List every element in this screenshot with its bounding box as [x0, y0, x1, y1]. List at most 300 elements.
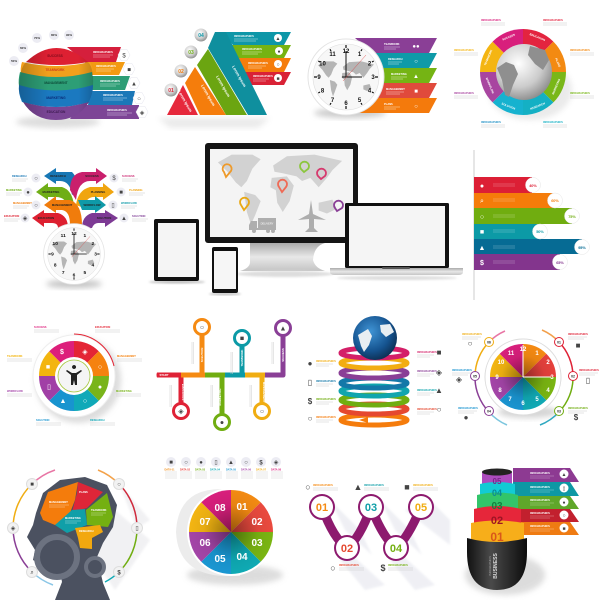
labels: INFOGRAPHICS — [417, 388, 437, 392]
clock: 9 — [51, 252, 54, 258]
node icons: ◈ — [178, 408, 184, 416]
panel: pie clock with numbered ring — [452, 330, 599, 425]
gears — [37, 537, 104, 577]
bar icons and text: ▲ — [479, 245, 485, 252]
outer progress arc — [74, 334, 114, 366]
labels: INFOGRAPHICS — [454, 91, 474, 95]
right ribbons: INFOGRAPHICS — [242, 47, 262, 51]
end circles — [526, 178, 590, 270]
top legend: ▲ — [228, 460, 234, 466]
icons — [118, 50, 148, 118]
end circles: 40% — [529, 184, 537, 188]
labels: EDUCATION — [95, 325, 110, 329]
ring arcs — [13, 470, 137, 585]
triangle strips: Lorem Ipsum — [215, 75, 231, 98]
percent bubbles — [9, 30, 74, 66]
triangle strips: Lorem Ipsum — [200, 84, 216, 107]
right ribbons: INFOGRAPHICS — [530, 524, 550, 528]
numbered balls: 03 — [188, 50, 194, 56]
pie — [187, 488, 275, 576]
clock: 1 — [358, 52, 362, 58]
rings — [341, 348, 407, 425]
side icons and labels — [4, 174, 148, 222]
clock pie: 6 — [521, 401, 525, 407]
icons: ■ — [404, 482, 410, 492]
clock: 10 — [53, 241, 58, 247]
bar icons and text: ⌕ — [480, 198, 484, 205]
ring segments: MARKETING — [551, 78, 561, 95]
ribbons: RESEARCH — [388, 57, 403, 61]
side icons and labels: EDUCATION — [4, 214, 19, 218]
brain regions — [40, 482, 113, 549]
numbered badges: 06 — [487, 340, 491, 344]
panel: person wheel — [7, 325, 142, 425]
labels: INFOGRAPHICS — [388, 563, 408, 567]
panel: clock with ribbons — [308, 38, 437, 118]
ribbons: ○ — [414, 59, 418, 65]
arrows: PLANNING — [91, 190, 105, 194]
branch labels: TEAMWORK — [240, 350, 244, 366]
icons — [308, 348, 443, 423]
ring icons — [8, 478, 142, 578]
pie: 05 — [214, 554, 226, 565]
ring icons: ○ — [117, 482, 121, 488]
icons: ▲ — [435, 386, 443, 395]
ribbons: INFOGRAPHICS — [93, 50, 113, 54]
circles: 04 — [390, 543, 403, 555]
clock: 5 — [358, 98, 362, 104]
delivery truck: DELIVERY — [261, 222, 274, 226]
clock: 11 — [61, 233, 66, 239]
connector — [322, 507, 421, 548]
icons: ○ — [437, 405, 442, 414]
labels: TEAMWORK — [7, 354, 23, 358]
clock: 9 — [317, 75, 321, 81]
labels: INFOGRAPHICS — [364, 483, 384, 487]
labels: INFOGRAPHICS — [568, 332, 588, 336]
right ribbons: INFOGRAPHICS — [530, 498, 550, 502]
brain regions: MANAGEMENT — [49, 500, 68, 504]
bars — [474, 177, 582, 270]
backing disc — [176, 489, 240, 576]
top legend: ▯ — [214, 460, 218, 466]
arcs — [475, 330, 573, 425]
branches — [181, 327, 283, 422]
icons — [305, 482, 410, 573]
horizontal line: START — [159, 373, 169, 377]
ring segments: TEAMWORK — [483, 49, 493, 66]
clock pie: 12 — [520, 347, 527, 353]
labels: INFOGRAPHICS — [458, 406, 478, 410]
right ribbons: INFOGRAPHICS — [530, 511, 550, 515]
branch labels — [170, 342, 285, 407]
top legend — [164, 457, 283, 478]
numbered badges: 03 — [557, 410, 561, 414]
icons — [456, 339, 590, 422]
right ribbons — [221, 32, 291, 85]
icons: ■ — [576, 341, 581, 350]
ring icons: ⌕ — [30, 570, 34, 576]
icons: $ — [122, 54, 126, 60]
clock: 5 — [83, 270, 86, 276]
right ribbons — [513, 468, 579, 535]
clock pie: 1 — [535, 351, 539, 357]
panel: globe ring — [454, 18, 594, 127]
side icons and labels: $ — [112, 176, 116, 182]
arrows: SOLUTION — [97, 216, 111, 220]
branch labels: MANAGEMENT — [262, 382, 266, 402]
pie: 01 — [236, 502, 248, 513]
clock pie: 10 — [498, 360, 505, 366]
clock: 1 — [83, 233, 86, 239]
top legend: $ — [259, 460, 263, 466]
ribbons — [355, 38, 437, 113]
icons: ● — [308, 359, 313, 368]
stacked layers: 04 — [492, 488, 502, 498]
arrows: WORKFLOW — [83, 203, 101, 207]
labels: INFOGRAPHICS — [316, 397, 336, 401]
clock pie: 4 — [546, 388, 550, 394]
labels: MANAGEMENT — [117, 354, 136, 358]
ribbons: MARKETING — [391, 72, 407, 76]
ribbons: ●● — [412, 44, 420, 50]
wheel segments — [39, 341, 109, 411]
right ribbons: ■ — [276, 76, 280, 82]
labels: INFOGRAPHICS — [570, 48, 590, 52]
side icons and labels: ■ — [119, 190, 123, 196]
numbered balls: 02 — [178, 69, 184, 75]
bar icons and text — [479, 183, 515, 267]
labels — [454, 18, 594, 127]
percent bubbles: 80% — [51, 33, 57, 37]
wheel segments: ■ — [46, 364, 50, 371]
labels: INFOGRAPHICS — [417, 407, 437, 411]
sphere bands: MANAGEMENT — [44, 81, 68, 85]
wheel segments: ▲ — [60, 398, 66, 405]
end circles: 75% — [568, 215, 576, 219]
icons: ▯ — [308, 378, 312, 387]
panel: stacked capsule — [465, 468, 579, 595]
branch labels: SUCCESS — [281, 348, 285, 362]
right ribbons: ○ — [562, 513, 566, 519]
brain regions: MARKETING — [65, 516, 81, 520]
ribbons: PLANS — [384, 102, 393, 106]
stacked layers — [471, 468, 524, 544]
icons: ○ — [468, 339, 473, 348]
end circles: 50% — [536, 230, 544, 234]
end circles: 60% — [551, 199, 559, 203]
ribbons: INFOGRAPHICS — [96, 64, 116, 68]
icons: ○ — [330, 563, 336, 573]
bar icons and text: ● — [480, 183, 484, 190]
labels: INFOGRAPHICS — [568, 406, 588, 410]
circles: 03 — [365, 502, 377, 514]
clock: 8 — [54, 262, 57, 268]
side icons and labels: ● — [26, 190, 30, 196]
clock pie: 5 — [535, 397, 539, 403]
clock: 12 — [343, 49, 350, 55]
top legend: DATA 07 — [256, 468, 267, 472]
right ribbons: INFOGRAPHICS — [234, 34, 254, 38]
wheel segments: ● — [98, 384, 102, 391]
clock: 3 — [371, 75, 375, 81]
panel: devices — [149, 143, 463, 295]
clock: 8 — [321, 88, 325, 94]
wheel segments: ◈ — [82, 349, 88, 356]
percent bubbles: 90% — [66, 33, 72, 37]
clock pie — [485, 339, 561, 415]
node icons — [178, 324, 286, 426]
arrows: MANAGEMENT — [52, 203, 72, 207]
icons: ○ — [308, 414, 313, 423]
brain regions: PLANS — [79, 490, 88, 494]
right ribbons: ■ — [562, 526, 566, 532]
right ribbons: ● — [277, 49, 281, 55]
ring segments: PLANS — [554, 57, 562, 68]
pie: 07 — [199, 517, 211, 528]
panel: numbered pie — [164, 457, 283, 585]
side icons and labels: MANAGEMENT — [13, 201, 32, 205]
numbered badges: 05 — [473, 374, 477, 378]
right ribbons: INFOGRAPHICS — [253, 74, 273, 78]
icons: ▲ — [354, 482, 362, 492]
panel: globe with spiral rings — [308, 316, 443, 425]
top legend: ◈ — [274, 460, 279, 466]
clock: 4 — [368, 88, 372, 94]
arrows: RESEARCH — [50, 174, 66, 178]
phone — [209, 247, 241, 295]
clock: 7 — [62, 270, 65, 276]
head silhouette — [27, 477, 117, 600]
labels: INFOGRAPHICS — [316, 379, 336, 383]
top legend: DATA 06 — [241, 468, 252, 472]
icons: $ — [380, 563, 386, 573]
pie: 08 — [214, 503, 226, 514]
labels: INFOGRAPHICS — [339, 563, 359, 567]
node icons: ▲ — [280, 326, 286, 332]
clock: 3 — [94, 252, 97, 258]
clock: 6 — [344, 101, 348, 107]
panel: timeline — [156, 320, 290, 430]
top legend: DATA 03 — [195, 468, 206, 472]
pie: 04 — [236, 552, 248, 563]
top legend: ○ — [184, 460, 188, 466]
labels: INFOGRAPHICS — [417, 350, 437, 354]
icons: ▲ — [131, 82, 137, 88]
ring segments: SUCCESS — [502, 33, 516, 41]
percent bubbles: 70% — [34, 36, 40, 40]
labels: INFOGRAPHICS — [452, 368, 472, 372]
sphere bands: MARKETING — [46, 96, 66, 100]
clock: 2 — [368, 62, 372, 68]
stacked layers: 03 — [491, 501, 503, 512]
numbered balls — [164, 28, 208, 96]
labels: RESEARCH — [90, 418, 105, 422]
ring icons: $ — [117, 570, 121, 576]
ring segments: SOLUTION — [501, 102, 516, 111]
arrows: SUCCESS — [85, 174, 99, 178]
ribbons: INFOGRAPHICS — [100, 79, 120, 83]
ring icons: ■ — [30, 482, 34, 488]
side icons and labels: PLANNING — [129, 188, 143, 192]
numbered badges — [470, 338, 578, 416]
clock: 12 — [71, 231, 77, 237]
ring segments: EDUCATION — [529, 32, 546, 42]
side icons and labels: ▯ — [111, 203, 115, 209]
ribbons: ▲ — [413, 74, 419, 80]
wheel segments: ○ — [83, 398, 87, 405]
percent bubbles: 60% — [20, 46, 26, 50]
ribbons: INFOGRAPHICS — [103, 93, 123, 97]
side icons and labels: ▲ — [121, 216, 127, 222]
pie: 02 — [251, 517, 263, 528]
clock: 10 — [319, 62, 326, 68]
numbered badges: 01 — [557, 340, 561, 344]
clock pie: 9 — [495, 375, 499, 381]
numbered balls: 01 — [168, 88, 174, 94]
map pins — [223, 162, 343, 211]
ribbons: ○ — [414, 104, 418, 110]
side icons and labels: WORKFLOW — [121, 201, 137, 205]
ring segments: WORKFLOW — [485, 77, 495, 95]
panel: triangle chart — [158, 28, 291, 128]
right ribbons: INFOGRAPHICS — [248, 61, 268, 65]
top legend: ○ — [244, 460, 248, 466]
globe — [496, 44, 552, 100]
sphere bands: EDUCATION — [47, 110, 66, 114]
labels: INFOGRAPHICS — [417, 369, 437, 373]
wheel segments: $ — [60, 349, 64, 356]
right ribbons: ▲ — [562, 472, 566, 478]
ribbons: INFOGRAPHICS — [107, 108, 127, 112]
node icons: ■ — [240, 336, 244, 342]
globe — [353, 316, 397, 360]
labels: INFOGRAPHICS — [481, 18, 501, 22]
labels: WORKFLOW — [7, 389, 23, 393]
clock pie: 8 — [498, 388, 502, 394]
numbered balls: 04 — [198, 33, 204, 39]
right ribbons: INFOGRAPHICS — [530, 485, 550, 489]
icons: ○ — [305, 482, 311, 492]
center person — [55, 357, 93, 395]
arrows: EDUCATION — [38, 216, 54, 220]
arrows — [32, 168, 118, 228]
icons: ◈ — [140, 110, 145, 116]
icons: ▯ — [586, 376, 590, 385]
clock — [308, 39, 384, 115]
circles — [309, 494, 434, 561]
branch labels: EDUCATION — [181, 384, 185, 400]
stacked layers: 05 — [493, 477, 502, 486]
end circles: 65% — [556, 261, 564, 265]
clock pie: 2 — [546, 360, 550, 366]
triangle strips: Lorem Ipsum — [177, 90, 193, 113]
black capsule: INFOGRAPHICS — [488, 556, 492, 576]
labels: INFOGRAPHICS — [454, 48, 474, 52]
stacked layers: 01 — [490, 530, 504, 544]
side icons and labels: MARKETING — [6, 188, 22, 192]
bar icons and text: $ — [480, 260, 484, 267]
clock: 2 — [91, 241, 94, 247]
clock: 11 — [329, 52, 336, 58]
clock: 4 — [91, 262, 94, 268]
wheel segments: ○ — [98, 364, 102, 371]
circles: 02 — [341, 543, 353, 555]
monitor — [205, 143, 358, 277]
pie: 06 — [199, 538, 211, 549]
percent bubbles: 50% — [11, 59, 17, 63]
icons: $ — [574, 413, 579, 422]
branch labels: MARKETING — [218, 389, 222, 405]
laptop — [330, 203, 463, 280]
bar icons and text: ○ — [480, 214, 484, 221]
sphere bands — [19, 48, 93, 120]
side icons and labels: RESEARCH — [12, 174, 27, 178]
black capsule: BUSINESS — [493, 553, 499, 579]
icons: ● — [464, 413, 469, 422]
top legend: ● — [199, 460, 203, 466]
pie: 03 — [251, 538, 263, 549]
top legend: DATA 02 — [180, 468, 191, 472]
stacked layers: 02 — [491, 515, 503, 527]
labels — [313, 483, 438, 570]
icons: ◈ — [436, 368, 443, 377]
labels: INFOGRAPHICS — [413, 483, 433, 487]
clock — [44, 224, 104, 284]
right ribbons: ● — [562, 500, 566, 506]
brain regions: RESEARCH — [79, 529, 94, 533]
clock pie: 3 — [550, 375, 554, 381]
labels — [316, 350, 437, 422]
triangle strips — [167, 32, 267, 115]
labels: SUCCESS — [34, 325, 47, 329]
black capsule — [467, 538, 527, 590]
right ribbons: ▯ — [563, 486, 566, 492]
side icons and labels: SUCCESS — [122, 174, 135, 178]
circles: 05 — [415, 502, 427, 514]
clock pie: 11 — [508, 351, 515, 357]
ribbons: ■ — [414, 89, 418, 95]
side icons and labels: ○ — [34, 203, 38, 209]
ribbons: TEAMWORK — [384, 42, 400, 46]
icons: ○ — [137, 96, 141, 102]
node icons: ○ — [260, 408, 264, 416]
labels: INFOGRAPHICS — [570, 91, 590, 95]
labels: MARKETING — [116, 389, 132, 393]
tablet — [149, 219, 205, 284]
ribbons — [67, 47, 139, 119]
ring segments: RESEARCH — [530, 101, 546, 111]
labels: INFOGRAPHICS — [579, 368, 599, 372]
top legend: DATA 01 — [164, 468, 175, 472]
right ribbons: INFOGRAPHICS — [530, 471, 550, 475]
numbered badges: 02 — [571, 374, 575, 378]
ring icons: ▯ — [135, 526, 139, 532]
end circles: 95% — [578, 246, 586, 250]
top legend: DATA 08 — [271, 468, 282, 472]
arrows: MARKETING — [43, 190, 59, 194]
side icons and labels: SOLUTION — [132, 214, 146, 218]
bar icons and text: ■ — [480, 229, 484, 236]
labels: INFOGRAPHICS — [543, 120, 563, 124]
labels: INFOGRAPHICS — [316, 359, 336, 363]
clock: 6 — [73, 272, 76, 278]
labels: INFOGRAPHICS — [462, 332, 482, 336]
right ribbons: ▲ — [276, 36, 280, 42]
icons: ■ — [127, 68, 131, 74]
right ribbons: ○ — [276, 62, 280, 68]
panel: head with brain — [8, 470, 150, 600]
